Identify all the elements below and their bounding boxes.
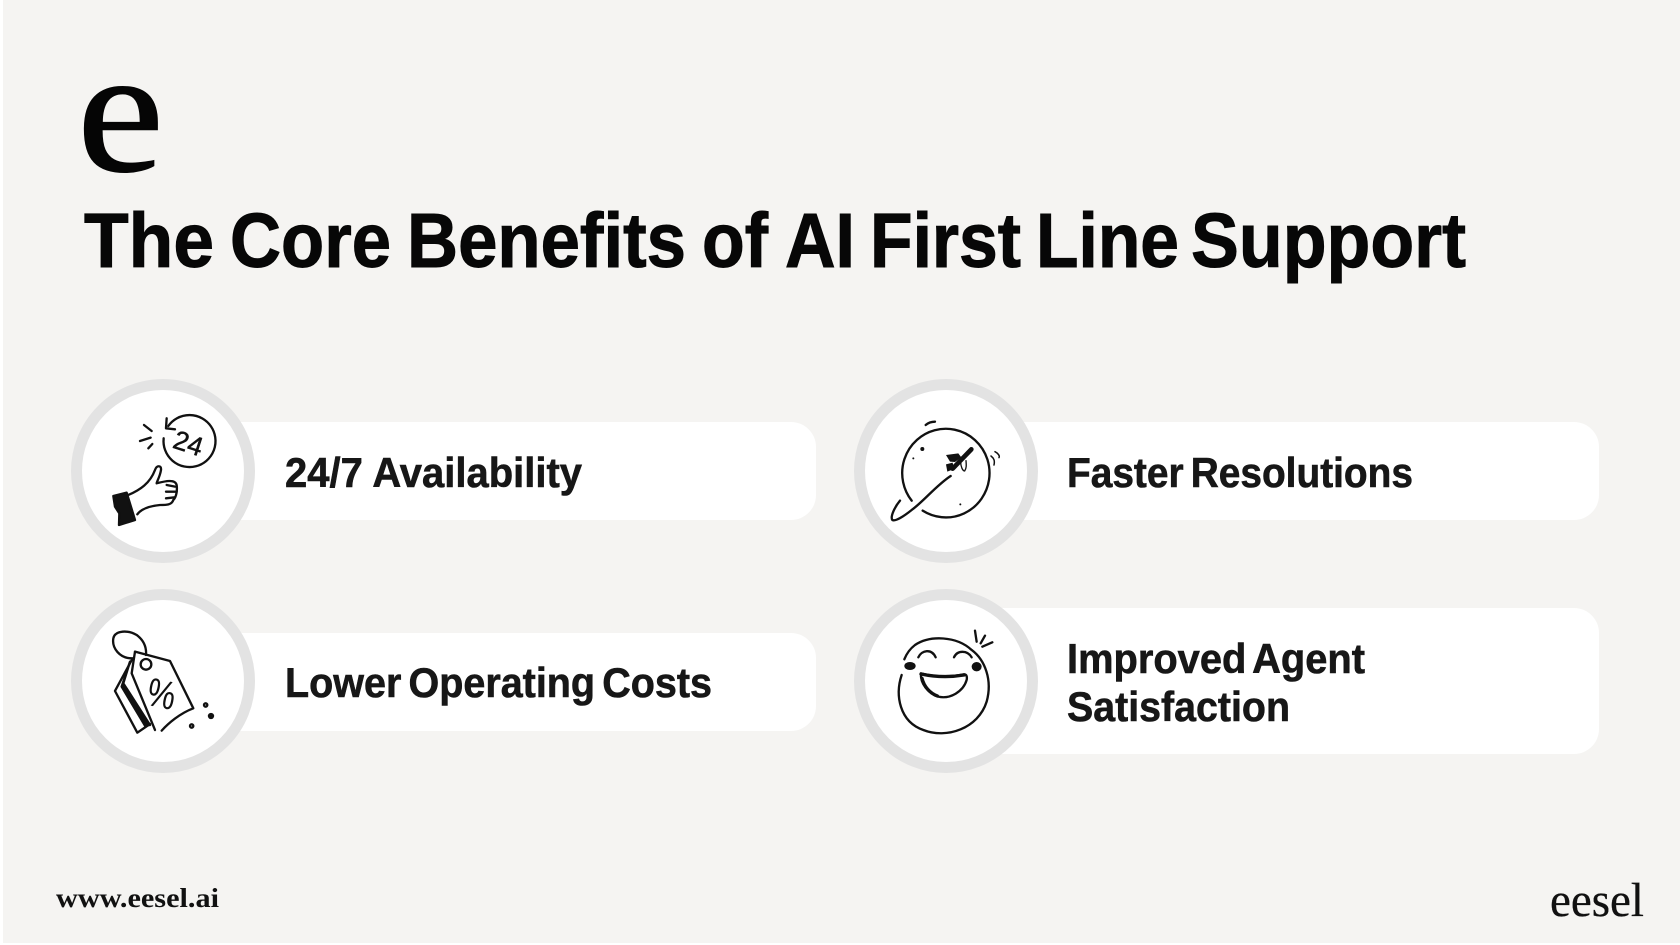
- title: AI: [785, 198, 855, 284]
- logo: e mark: e: [77, 13, 164, 210]
- icon: plane orbiting a globe: [892, 422, 999, 520]
- icon circle: [860, 594, 1032, 768]
- label pill: [163, 422, 816, 520]
- footer wordmark: eesel: [1550, 874, 1644, 927]
- title: Core: [230, 198, 391, 284]
- label pill: [946, 608, 1599, 754]
- title: of: [702, 198, 768, 284]
- label text: Faster Resolutions: [1067, 449, 1413, 496]
- label text: Lower Operating Costs: [285, 659, 712, 706]
- icon circle: [76, 594, 250, 768]
- icon: thumbs up with 24: [113, 415, 216, 525]
- title: Line: [1036, 198, 1179, 284]
- icon circle: [76, 384, 250, 558]
- icon: laughing face: [899, 631, 992, 733]
- label text: 24/7 Availability: [285, 449, 583, 496]
- title: Benefits: [407, 198, 686, 284]
- title: Support: [1191, 198, 1466, 284]
- label text: [1067, 635, 1365, 730]
- footer url: www.eesel.ai: [56, 883, 220, 913]
- title: First: [870, 198, 1021, 284]
- title: The: [84, 198, 214, 284]
- label pill: [946, 422, 1599, 520]
- label text: Satisfaction: [1067, 683, 1290, 730]
- panel: improved agent satisfaction: [860, 594, 1599, 768]
- panel: faster resolutions: [860, 384, 1599, 558]
- label pill: [163, 633, 816, 731]
- icon: price tag: %: [143, 669, 180, 719]
- icon circle: [860, 384, 1032, 558]
- panel: 24/7 availability: [76, 384, 816, 558]
- panel: lower operating costs: [76, 594, 816, 768]
- icon: thumbs up with 24: 24: [170, 425, 207, 462]
- label text: Improved Agent: [1067, 635, 1365, 682]
- icon: price tag: [113, 632, 213, 733]
